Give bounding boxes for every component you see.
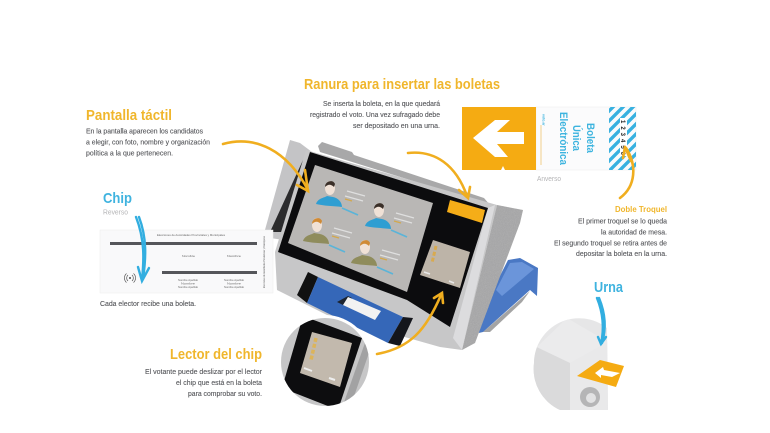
title: doble troquel: Doble Troquel: [615, 204, 667, 214]
ballot front: [462, 106, 636, 170]
candidate 4: [351, 240, 400, 274]
ballot reverse card: Nombre Apellido: [178, 285, 198, 289]
arrow: lector: [377, 293, 443, 354]
ballot reverse card: Nombre: [227, 282, 241, 286]
voting machine: [263, 140, 538, 350]
icon: contactless chip: [124, 274, 136, 282]
ballot reverse card: Nombre: [227, 254, 241, 258]
text: ranura description: ser depositado en una urna.: [353, 121, 440, 130]
text: pantalla description: [86, 126, 210, 158]
ballot title: Boleta: [584, 123, 596, 154]
text: cada elector: Cada elector recibe una boleta.: [100, 299, 196, 308]
ballot reverse card: Nombre Apellido: [178, 278, 198, 282]
left wing of the case: [263, 140, 312, 240]
ballot stripes: [609, 107, 636, 170]
black bezel: [278, 152, 488, 327]
ballot front: voto.ar: [542, 114, 546, 126]
text: lector description: el chip que está en la boleta: [176, 378, 263, 387]
arrow: ranura: [408, 153, 470, 198]
text: doble troquel description: la autoridad de mesa.: [601, 228, 667, 236]
arrow: chip: [136, 217, 149, 281]
ballot title: [557, 112, 596, 166]
ballot reverse card: [100, 230, 273, 293]
text: ranura description: Se inserta la boleta, en la que quedará: [323, 99, 441, 108]
candidate 2: [365, 203, 414, 237]
ballot front: 1 2 3 4 5 6: [619, 120, 625, 156]
icon: white arrow: [473, 120, 524, 157]
title: ranura: Ranura para insertar las boletas: [304, 76, 500, 93]
label: reverso: Reverso: [103, 208, 128, 216]
candidate 1: [316, 181, 365, 215]
arrow: urna: [597, 298, 606, 344]
text: lector description: [145, 367, 263, 398]
text: pantalla description: política a la que pertenecen.: [86, 148, 173, 158]
ballot entering box: [577, 360, 624, 387]
title: urna: Urna: [594, 279, 624, 296]
touch screen: [288, 165, 433, 292]
text: ranura description: [310, 99, 441, 130]
text: ranura description: registrado el voto. Una vez sufragado debe: [310, 110, 440, 119]
text: pantalla description: a elegir, con foto, nombre y organización: [86, 138, 210, 146]
ballot reverse card: Nombre: [181, 282, 195, 286]
text: doble troquel description: [554, 216, 668, 258]
title: pantalla: Pantalla táctil: [86, 107, 172, 124]
text: lector description: El votante puede deslizar por el lector: [145, 367, 262, 376]
text: pantalla description: En la pantalla aparecen los candidatos: [86, 126, 203, 136]
ballot reverse card: Nombre Apellido: [224, 278, 244, 282]
textured side panel: [462, 205, 523, 350]
arrow: pantalla: [223, 141, 308, 191]
text: doble troquel description: depositar la boleta en la urna.: [576, 249, 667, 258]
title: lector del chip: Lector del chip: [170, 346, 262, 363]
ballot title: Electrónica: [557, 112, 569, 166]
top rear ridge: [318, 142, 490, 205]
title: chip: Chip: [103, 190, 132, 207]
front body of the case: [275, 150, 497, 350]
text: lector description: para comprobar su voto.: [188, 389, 262, 398]
text: doble troquel description: El segundo troquel se retira antes de: [554, 238, 667, 248]
ballot reverse card: Nombre Apellido: [224, 285, 244, 289]
ballot slot: [447, 200, 485, 223]
ballot reverse card: Elecciones de Autoridades Provinciales y Municipales: [157, 233, 225, 237]
candidate 3: [303, 218, 352, 252]
label: anverso: Anverso: [537, 174, 561, 183]
icon: seal: [580, 387, 600, 407]
blue rear support: [470, 258, 538, 335]
ballot reverse card: Nombre: [182, 254, 195, 258]
ballot yellow panel: [462, 107, 536, 170]
circle: chip reader detail: [281, 315, 369, 406]
chip reader: [420, 240, 470, 288]
ballot reverse card: Elecciones de Autoridades Provinciales y Municipales: [262, 236, 266, 288]
arrow: doble troquel: [620, 147, 633, 198]
text: doble troquel description: El primer troquel se lo queda: [578, 216, 668, 226]
ballot box illustration: [534, 318, 624, 410]
blue ballot tray: [297, 272, 413, 346]
ballot title: Única: [570, 125, 583, 152]
